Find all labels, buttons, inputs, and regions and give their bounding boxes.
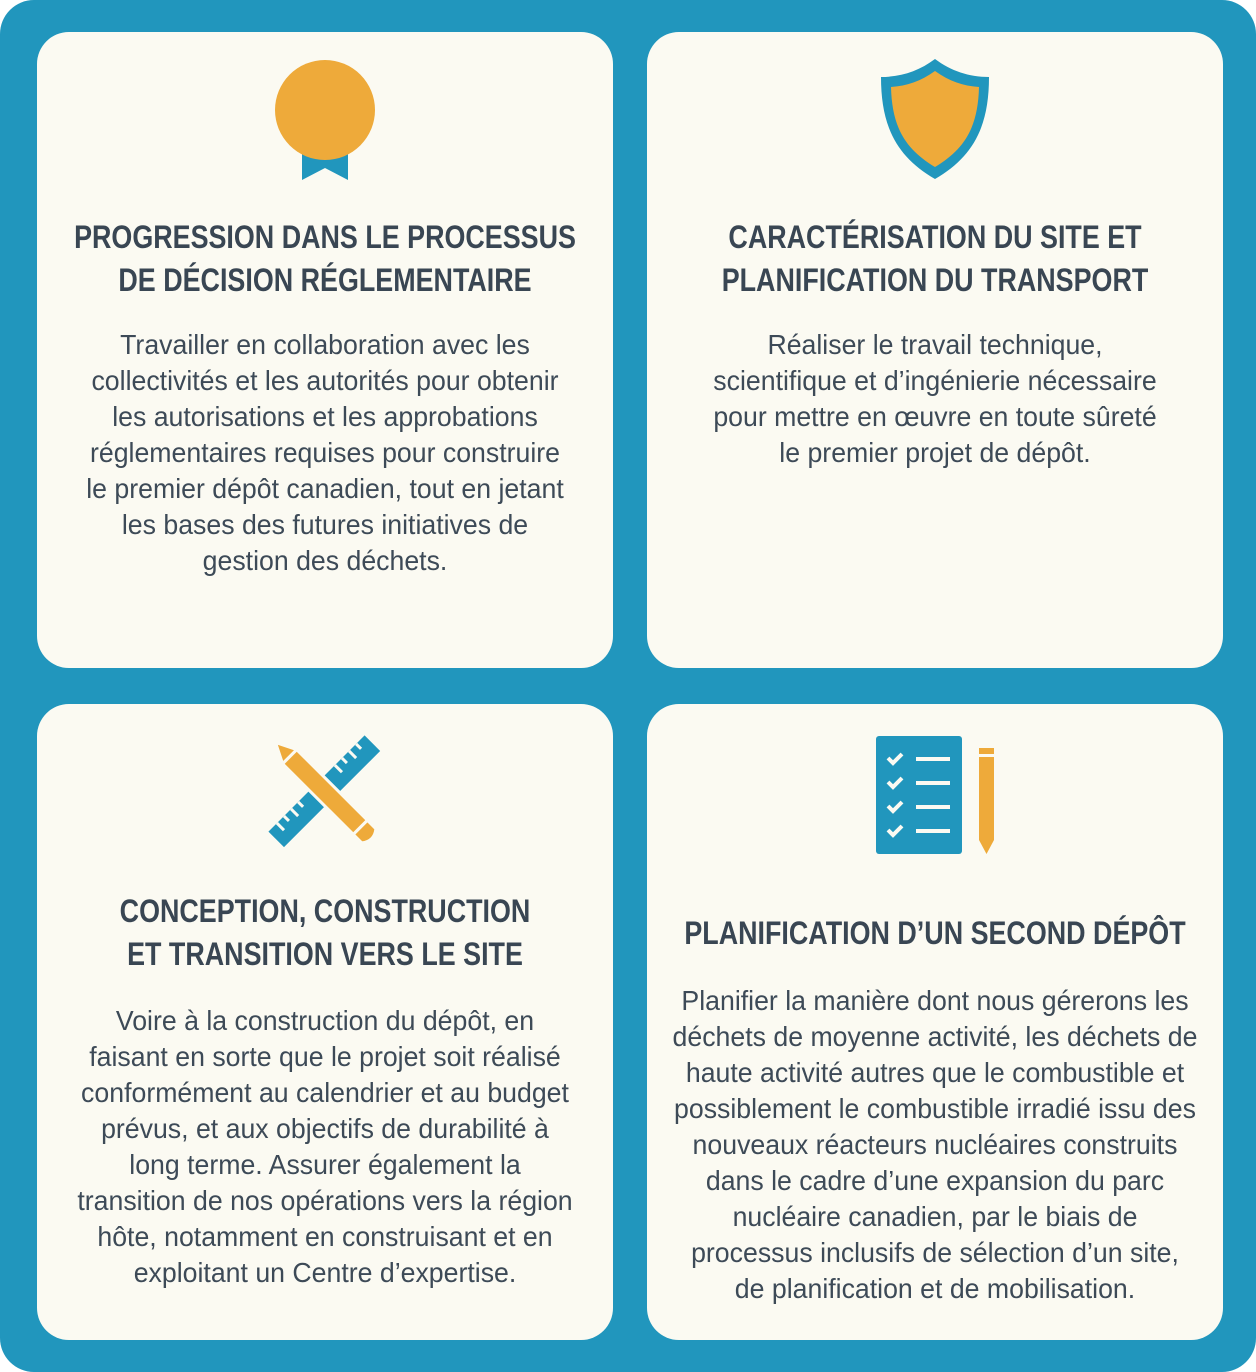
panel: regulatory decision bbox=[37, 32, 613, 668]
body text: Travailler en collaboration avec les bbox=[120, 329, 530, 360]
body text: pour mettre en œuvre en toute sûreté bbox=[713, 401, 1157, 432]
heading: ET TRANSITION VERS LE SITE bbox=[127, 936, 523, 972]
body text bbox=[713, 329, 1157, 468]
heading: PROGRESSION DANS LE PROCESSUS bbox=[74, 219, 576, 255]
body text: Planifier la manière dont nous gérerons les bbox=[681, 985, 1189, 1016]
body text: nucléaire canadien, par le biais de bbox=[733, 1201, 1137, 1232]
body text bbox=[673, 985, 1197, 1304]
body text: scientifique et d’ingénierie nécessaire bbox=[713, 365, 1157, 396]
body text: Voire à la construction du dépôt, en bbox=[116, 1005, 534, 1036]
body text: possiblement le combustible irradié issu des bbox=[674, 1093, 1196, 1124]
heading: CARACTÉRISATION DU SITE ET bbox=[728, 219, 1142, 255]
icon: medal bbox=[275, 60, 375, 180]
body text: long terme. Assurer également la bbox=[129, 1149, 521, 1180]
body text: dans le cadre d’une expansion du parc bbox=[706, 1165, 1164, 1196]
body text: de planification et de mobilisation. bbox=[735, 1273, 1135, 1304]
body text: conformément au calendrier et au budget bbox=[81, 1077, 569, 1108]
body text: prévus, et aux objectifs de durabilité à bbox=[101, 1113, 549, 1144]
body text: transition de nos opérations vers la région bbox=[77, 1185, 573, 1216]
heading: CONCEPTION, CONSTRUCTION bbox=[120, 893, 530, 929]
body text: nouveaux réacteurs nucléaires construits bbox=[693, 1129, 1177, 1160]
body text: haute activité autres que le combustible et bbox=[686, 1057, 1184, 1088]
heading bbox=[120, 893, 530, 972]
body text: les bases des futures initiatives de bbox=[122, 509, 528, 540]
body text: gestion des déchets. bbox=[203, 545, 447, 576]
panel: design and construction bbox=[37, 704, 613, 1340]
body text: Réaliser le travail technique, bbox=[767, 329, 1103, 360]
panel: second repository bbox=[647, 704, 1223, 1340]
icon: checklist and pencil bbox=[876, 736, 994, 854]
body text bbox=[77, 1005, 573, 1288]
heading: DE DÉCISION RÉGLEMENTAIRE bbox=[118, 262, 532, 298]
body text: déchets de moyenne activité, les déchets de bbox=[673, 1021, 1197, 1052]
panel: site characterization bbox=[647, 32, 1223, 668]
heading bbox=[722, 219, 1148, 298]
body text: hôte, notamment en construisant et en bbox=[97, 1221, 553, 1252]
heading bbox=[74, 219, 576, 298]
body text bbox=[86, 329, 564, 576]
body text: le premier projet de dépôt. bbox=[779, 437, 1091, 468]
body text: le premier dépôt canadien, tout en jetant bbox=[86, 473, 564, 504]
body text: collectivités et les autorités pour obtenir bbox=[91, 365, 559, 396]
body text: réglementaires requises pour construire bbox=[90, 437, 560, 468]
body text: les autorisations et les approbations bbox=[112, 401, 538, 432]
body text: processus inclusifs de sélection d’un site, bbox=[691, 1237, 1179, 1268]
heading: PLANIFICATION DU TRANSPORT bbox=[722, 262, 1148, 298]
body text: faisant en sorte que le projet soit réalisé bbox=[89, 1041, 561, 1072]
body text: exploitant un Centre d’expertise. bbox=[134, 1257, 516, 1288]
icon: shield bbox=[881, 59, 989, 179]
heading: PLANIFICATION D’UN SECOND DÉPÔT bbox=[684, 915, 1186, 951]
icon: pencil and ruler bbox=[268, 735, 380, 848]
